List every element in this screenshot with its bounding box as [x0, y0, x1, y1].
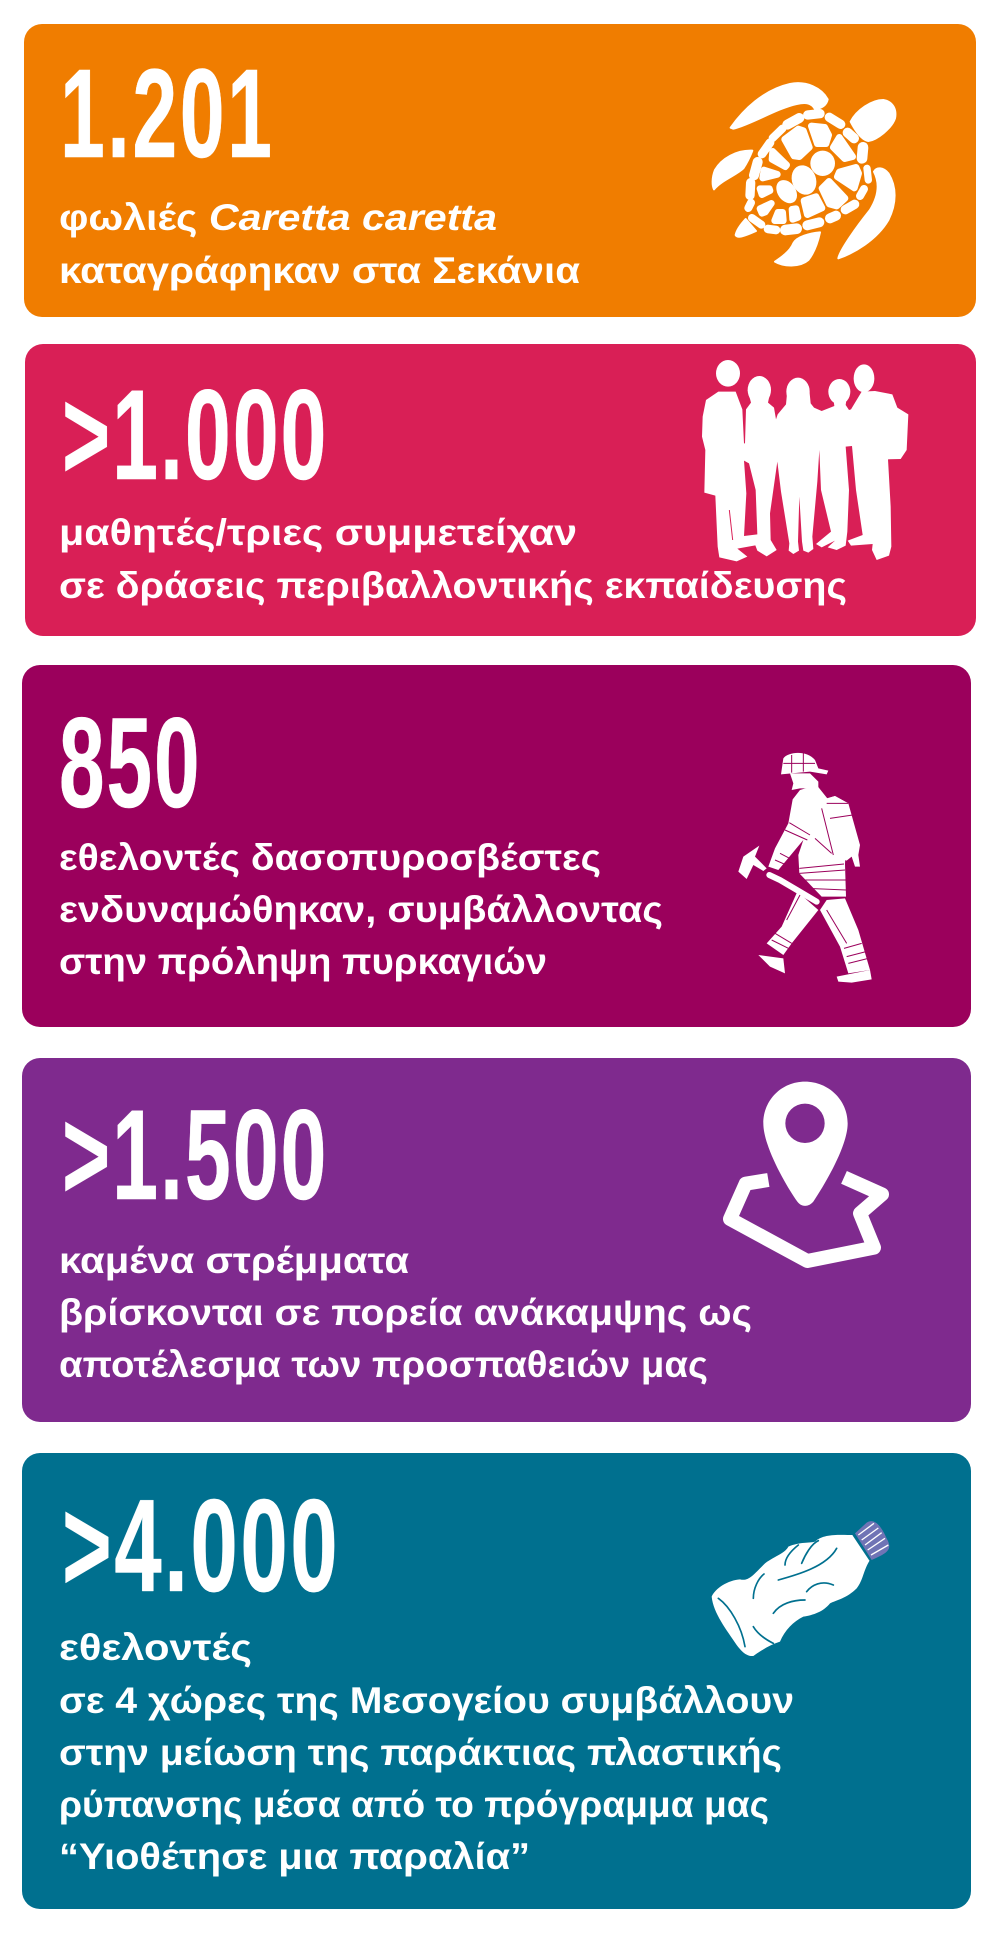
text: beach volunteers description: “Υιοθέτησε μια παραλία” [59, 1836, 530, 1877]
icon: group of students silhouette [702, 360, 908, 562]
text: turtle nests description: καταγράφηκαν στα Σεκάνια [59, 250, 580, 291]
number: >1.500: >1.500 [62, 1084, 328, 1226]
text: firefighters description: εθελοντές δασοπυροσβέστες [59, 837, 601, 878]
text: burned land description [59, 1240, 752, 1385]
text: beach volunteers description: ρύπανσης μέσα από το πρόγραμμα μας [59, 1784, 769, 1825]
text: turtle nests description: φωλιές Caretta caretta [59, 197, 497, 238]
text: firefighters description: ενδυναμώθηκαν, συμβάλλοντας [59, 889, 663, 930]
number: 1.201: 1.201 [60, 44, 275, 184]
text: beach volunteers description [59, 1627, 794, 1877]
icon: firefighter [738, 752, 872, 983]
text: students description: μαθητές/τριες συμμετείχαν [59, 512, 577, 553]
number: >4.000: >4.000 [62, 1471, 340, 1620]
number: 850: 850 [59, 691, 201, 834]
icon: map pin on land area [723, 1082, 889, 1268]
text: turtle nests description [59, 197, 580, 291]
panel: beach volunteers [22, 1453, 971, 1909]
text: students description [59, 512, 847, 606]
panel: firefighters [22, 665, 971, 1027]
icon: crushed plastic bottle [712, 1521, 890, 1656]
text: firefighters description [59, 837, 663, 982]
text: burned land description: αποτέλεσμα των προσπαθειών μας [59, 1344, 708, 1385]
panel: students [25, 344, 976, 636]
text: beach volunteers description: στην μείωση της παράκτιας πλαστικής [59, 1732, 782, 1773]
text: burned land description: βρίσκονται σε πορεία ανάκαμψης ως [59, 1292, 752, 1333]
text: beach volunteers description: εθελοντές [59, 1627, 252, 1668]
icon: turtle [712, 82, 896, 266]
text: firefighters description: στην πρόληψη πυρκαγιών [59, 941, 547, 982]
panel: burned land [22, 1058, 971, 1422]
number: >1.000: >1.000 [62, 364, 328, 506]
panel: turtle nests [24, 24, 976, 317]
text: burned land description: καμένα στρέμματα [59, 1240, 409, 1281]
text: beach volunteers description: σε 4 χώρες της Μεσογείου συμβάλλουν [59, 1680, 794, 1721]
text: students description: σε δράσεις περιβαλλοντικής εκπαίδευσης [59, 565, 847, 606]
